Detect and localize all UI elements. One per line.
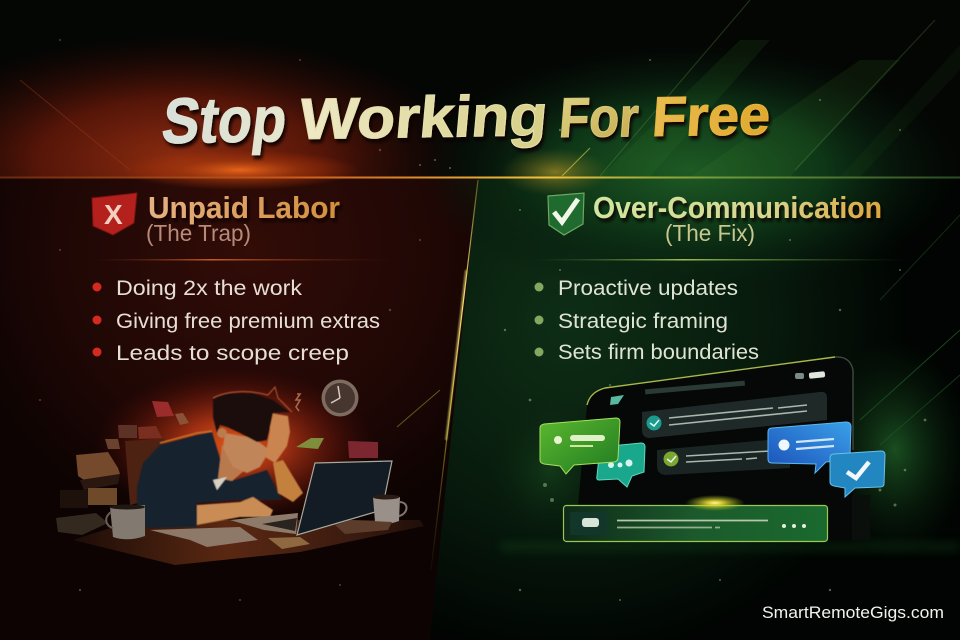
heading: over-communication: Over-Communication	[593, 190, 882, 225]
message row 1	[642, 392, 827, 438]
illustration: overworked freelancer at desk	[56, 367, 424, 565]
title	[158, 83, 773, 157]
bullet list: trap: Doing 2x the work	[116, 277, 303, 300]
title: Free	[650, 83, 773, 148]
bullet list: trap	[92, 277, 380, 365]
stack of books	[56, 452, 120, 535]
sub divider	[535, 259, 905, 260]
message row 2	[657, 438, 790, 475]
header divider line	[0, 176, 960, 178]
illustration: tablet with chat messages	[540, 357, 885, 542]
bullet list: fix: Proactive updates	[558, 277, 738, 300]
panel: unpaid labor	[92, 190, 392, 365]
green chat bubble	[540, 418, 620, 474]
subheading: the trap: (The Trap)	[146, 220, 251, 246]
sleepy zigzag mark	[296, 394, 300, 411]
footer website: SmartRemoteGigs.com	[762, 603, 944, 622]
bullet list: fix: Strategic framing	[558, 310, 728, 333]
bullet list: fix	[534, 277, 759, 364]
desk papers	[150, 527, 258, 547]
notebook stack	[335, 520, 392, 534]
subheading: the fix: (The Fix)	[665, 220, 755, 246]
floating papers	[105, 401, 378, 458]
sparkle	[685, 495, 745, 511]
tablet body	[575, 357, 870, 540]
heading: unpaid labor: Unpaid Labor	[148, 190, 340, 225]
title: Working	[297, 83, 551, 152]
sub divider	[92, 259, 392, 260]
person	[137, 387, 303, 528]
chair back	[125, 439, 165, 505]
left coffee mug	[106, 504, 145, 539]
icon: wall clock	[322, 380, 358, 416]
teal chat bubble	[597, 443, 645, 487]
bullet list: trap: Leads to scope creep	[116, 342, 349, 365]
right coffee mug	[372, 494, 407, 524]
sticky note	[268, 537, 310, 549]
icon: red x shield	[92, 193, 137, 235]
icon: green check shield	[548, 193, 584, 235]
bullet list: fix: Sets firm boundaries	[558, 341, 759, 364]
check chat bubble	[830, 451, 885, 497]
center diagonal divider	[397, 180, 478, 570]
blue chat bubble	[768, 422, 851, 473]
title: Stop	[158, 83, 291, 157]
title: For	[557, 85, 641, 149]
bullet list: trap: Giving free premium extras	[116, 310, 380, 333]
panel: over-communication	[534, 190, 905, 364]
bottom input bar	[564, 506, 828, 542]
laptop	[230, 461, 392, 535]
desk	[73, 520, 424, 565]
icon: red x shield: X	[104, 199, 123, 230]
